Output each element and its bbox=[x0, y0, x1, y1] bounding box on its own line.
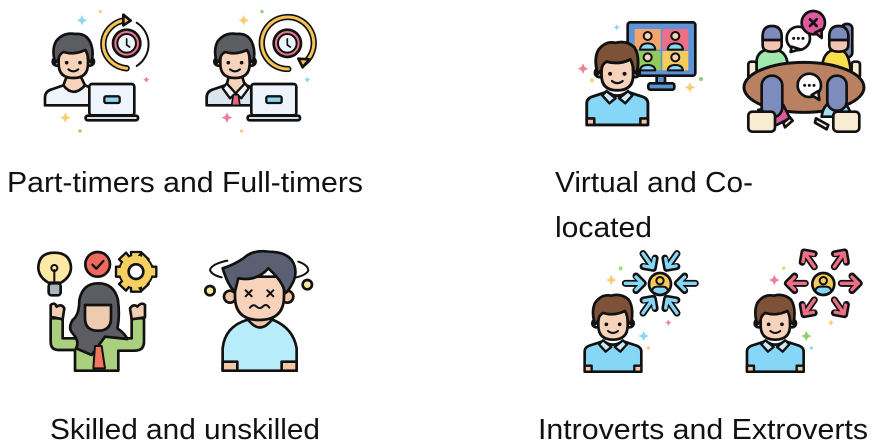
icon: extrovert with outward arrows bbox=[747, 248, 859, 372]
icon: man on video call bbox=[579, 22, 703, 125]
icon: part-timer with laptop and clock bbox=[45, 10, 149, 133]
label: part-timers and full-timers: Part-timers and Full-timers bbox=[7, 167, 363, 199]
label: virtual and co-located bbox=[555, 167, 753, 244]
label: virtual and co-located: located bbox=[555, 212, 652, 244]
icon: unskilled dizzy man bbox=[205, 251, 312, 371]
label: virtual and co-located: Virtual and Co- bbox=[555, 167, 753, 199]
icon: introvert with inward arrows bbox=[585, 249, 695, 372]
icon: full-timer with tie, laptop and clock bbox=[207, 10, 314, 133]
icon: skilled woman with idea, check and gear bbox=[38, 252, 156, 371]
icon: co-located team around table bbox=[744, 11, 864, 132]
